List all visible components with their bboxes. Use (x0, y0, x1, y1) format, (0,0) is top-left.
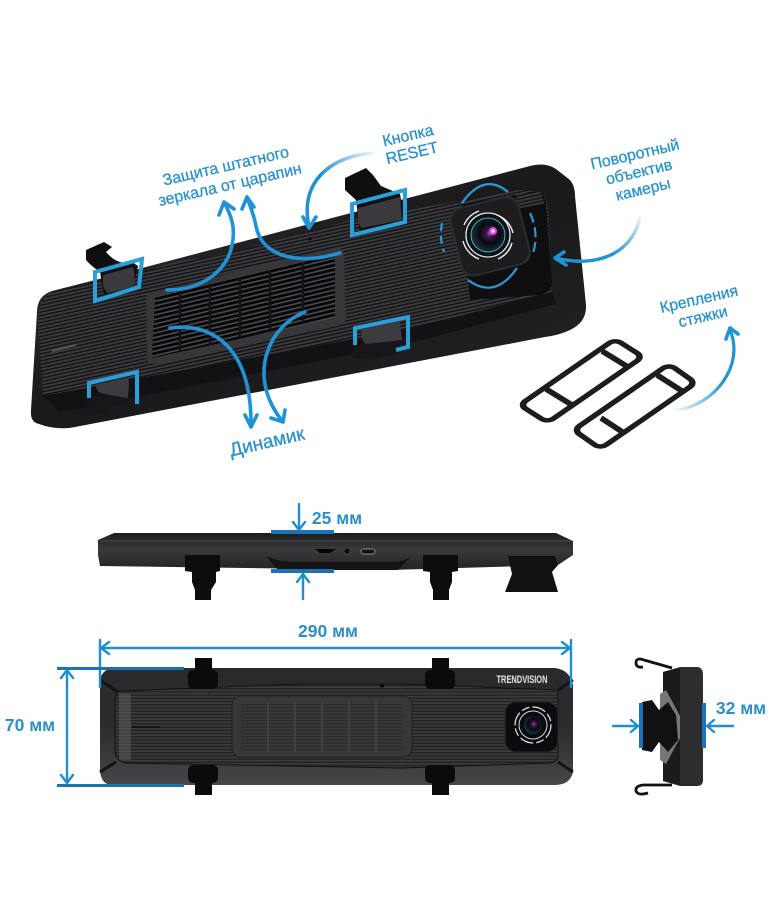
mirror shell (31, 165, 586, 428)
main mirror device, perspective view (31, 165, 586, 428)
arrow: speaker right (264, 312, 305, 422)
side body shading (663, 668, 680, 785)
dimension: 290 mm: 290 мм (298, 621, 358, 641)
clip pad bottom left (96, 378, 129, 398)
label: strap mounts (658, 283, 744, 334)
frame bottom left (89, 372, 137, 404)
arrow: speaker left (170, 327, 257, 427)
front indicator (132, 726, 160, 728)
edge view clip left (185, 555, 220, 600)
speaker surround (146, 248, 346, 364)
grille dividers (180, 262, 303, 352)
arrow: protection left (167, 202, 234, 290)
audio jack (344, 548, 350, 554)
edge view mount (505, 556, 558, 592)
clip top left (86, 242, 138, 294)
dimension: 290 mm (100, 621, 571, 687)
camera lens (463, 211, 513, 259)
camera top ribs (515, 192, 545, 208)
label: rotating lens (589, 136, 689, 208)
blue clip frames (89, 190, 408, 404)
clip pad top right (358, 197, 402, 228)
lower lip shadow (43, 292, 556, 412)
label: rotating lens: Поворотный (589, 136, 681, 173)
label: strap mounts: стяжки (677, 303, 729, 331)
dimension: 70 mm (5, 667, 184, 787)
camera rotation arcs (441, 184, 536, 288)
dimension: 32 mm (613, 698, 766, 748)
clip pad bottom right (362, 322, 402, 344)
front ribbed panel (115, 684, 558, 768)
clips, perspective view (78, 168, 406, 417)
front top notch (380, 685, 384, 687)
bottom edge view (98, 533, 573, 600)
brand logo: TRENDVISION (496, 674, 548, 686)
callout labels (153, 122, 744, 461)
front body (100, 668, 573, 785)
clips (188, 658, 455, 795)
edge view clip right (423, 555, 458, 600)
USB-C port (361, 549, 375, 554)
clip bottom right (352, 336, 406, 360)
arrow: camera (555, 217, 640, 265)
left light band (119, 694, 131, 760)
side view (636, 659, 703, 794)
camera block (447, 193, 534, 279)
speaker grille (152, 254, 335, 358)
side mount neck (660, 690, 680, 764)
side body (663, 667, 703, 786)
label: reset button: RESET (384, 139, 440, 168)
front view (100, 658, 573, 795)
dimension: 32 mm: 32 мм (716, 698, 766, 718)
label: strap mounts: Крепления (658, 283, 740, 317)
strap 1 (520, 339, 643, 423)
label: reset button (380, 122, 440, 168)
label: reset button: Кнопка (381, 122, 435, 150)
ribbed surface (38, 190, 552, 396)
side mount (642, 700, 678, 752)
dimension: 25 mm (271, 504, 362, 599)
label: mirror protection: зеркала от царапин (157, 160, 303, 210)
strap mounts (520, 339, 696, 449)
label: speaker: Динамик (227, 423, 307, 461)
edge view seam (100, 540, 572, 542)
clip top right (345, 168, 405, 232)
strap 2 (574, 364, 696, 449)
clip pad top left (103, 267, 135, 293)
indicator slot (52, 345, 76, 351)
frame top left (95, 259, 142, 301)
label: rotating lens: объектив (604, 157, 674, 188)
edge view body (98, 533, 573, 570)
callout arrows (167, 153, 738, 427)
edge view port recess (266, 556, 412, 570)
front camera block (505, 702, 558, 752)
top hook (636, 659, 672, 668)
corner highlights (100, 680, 573, 772)
frame bottom right (355, 317, 408, 350)
label: rotating lens: камеры (614, 175, 672, 205)
dimension: 70 mm: 70 мм (5, 715, 55, 735)
arrow: protection right (242, 197, 340, 259)
frame top right (352, 190, 405, 235)
reset hole (308, 237, 312, 241)
clip bottom left (78, 395, 134, 417)
front speaker (232, 696, 412, 757)
front lens (515, 707, 551, 743)
camera housing (462, 192, 552, 300)
label: mirror protection: Защита штатного (161, 144, 291, 190)
micro SD slot (315, 549, 336, 553)
bottom hook (636, 785, 672, 794)
arrow: reset button (303, 153, 373, 228)
dimension: 25 mm: 25 мм (312, 508, 362, 528)
arrow: strap mounts (677, 328, 738, 410)
